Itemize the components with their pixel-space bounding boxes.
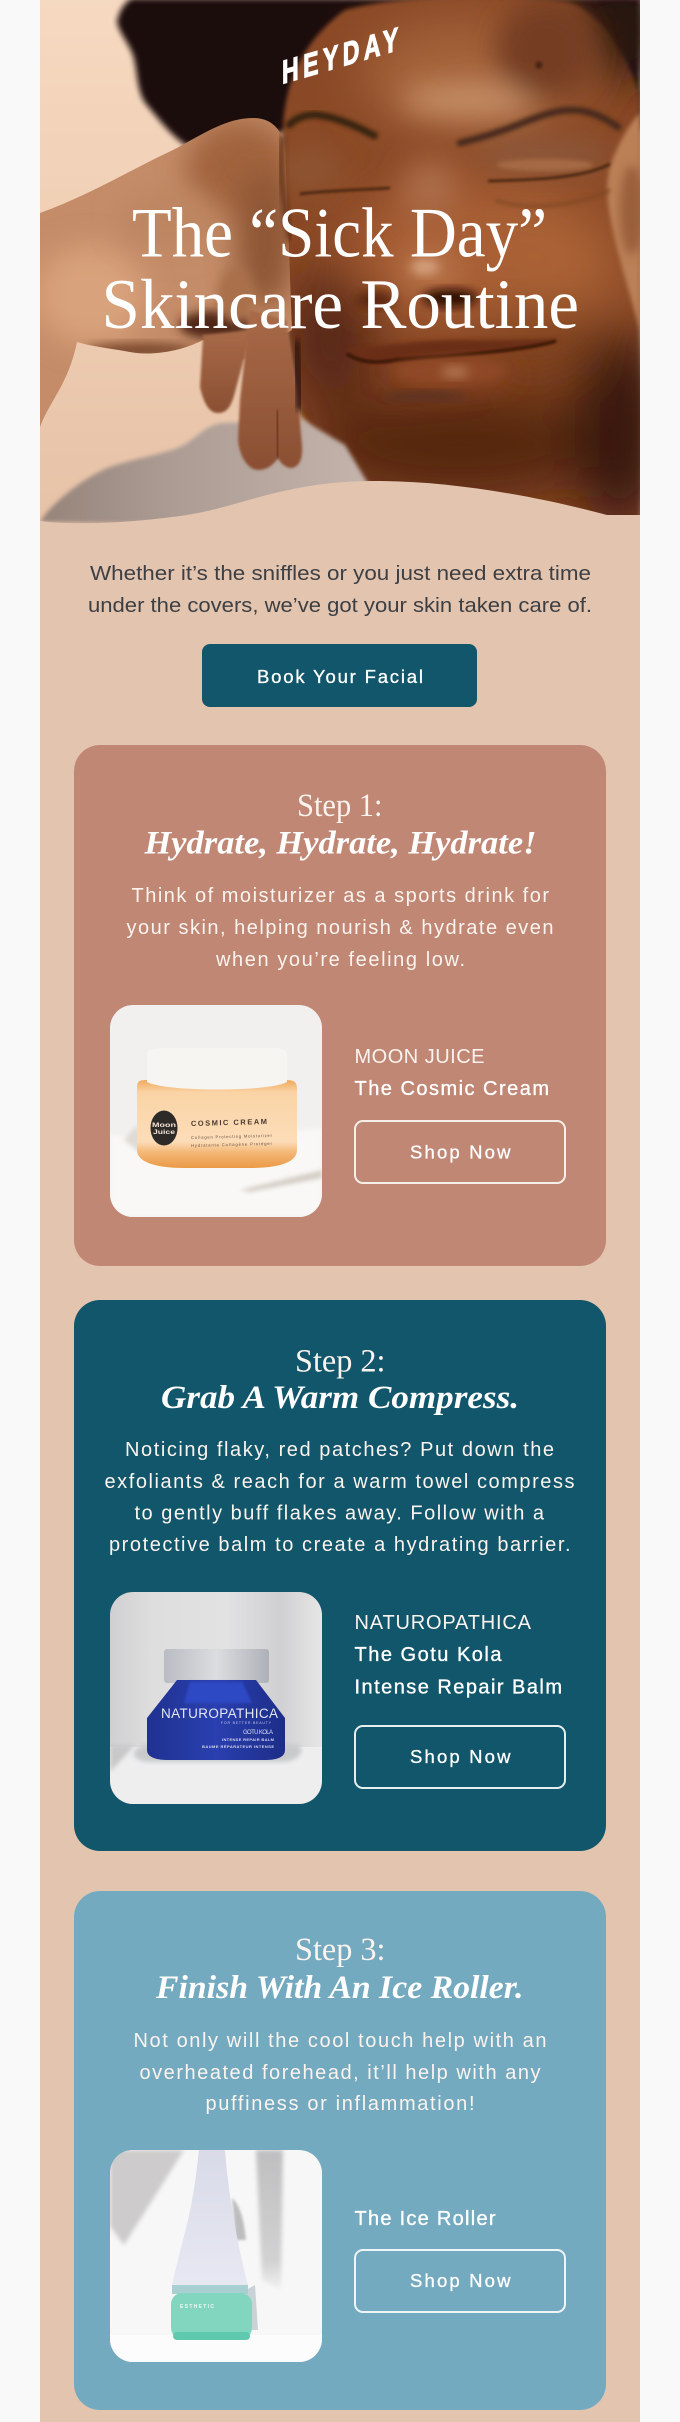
step 1 body text: Think of moisturizer as a sports drink for — [132, 885, 549, 907]
button: Book Your Facial — [202, 644, 477, 707]
product name: Naturopathica: NATUROPATHICA — [354, 1612, 532, 1634]
product photo: Cosmic Cream jar: Collagen Protecting Moisturizer — [191, 1133, 273, 1140]
step 3 heading: Step 3: — [295, 1932, 386, 1968]
step 2 body text — [104, 1439, 574, 1556]
step 1 heading — [143, 788, 537, 862]
step 2 heading: Grab A Warm Compress. — [161, 1380, 519, 1416]
intro text: Whether it’s the sniffles or you just need extra time — [90, 562, 591, 585]
intro text: under the covers, we’ve got your skin taken care of. — [88, 594, 592, 617]
product photo: ice roller: ESTHETIC — [180, 2304, 214, 2310]
step 3 body text: puffiness or inflammation! — [206, 2093, 474, 2115]
step 1 heading: Step 1: — [297, 788, 382, 824]
step 1 body text — [126, 885, 554, 971]
button: Shop Now — [355, 1726, 565, 1788]
step 2 body text: Noticing flaky, red patches? Put down the — [125, 1439, 554, 1461]
product photo: Cosmic Cream jar: COSMIC CREAM — [191, 1117, 267, 1128]
hero title: Skincare Routine — [102, 266, 579, 344]
button: Shop Now — [355, 2250, 565, 2312]
product name: Naturopathica: Intense Repair Balm — [354, 1676, 562, 1698]
hero title: The “Sick Day” — [132, 194, 547, 272]
product photo: Cosmic Cream jar: Hydratante Collagène Protéger — [191, 1141, 273, 1148]
step 1 body text: when you’re feeling low. — [215, 949, 465, 971]
hero title — [102, 194, 579, 344]
button: Shop Now — [355, 1121, 565, 1183]
product name: The Ice Roller: The Ice Roller — [354, 2208, 496, 2230]
step 2 body text: to gently buff flakes away. Follow with a — [134, 1502, 545, 1524]
step 2 body text: protective balm to create a hydrating barrier. — [109, 1534, 571, 1556]
step 2 body text: exfoliants & reach for a warm towel compress — [104, 1471, 574, 1493]
product photo: Cosmic Cream jar: Juice — [153, 1129, 176, 1136]
step 3 body text — [134, 2030, 546, 2115]
hero eyebrows, eyes, nose and mouth — [287, 62, 618, 401]
hero wave divider — [40, 481, 640, 534]
intro text — [88, 562, 592, 617]
product photo: Gotu Kola balm jar: GOTU KOLA — [243, 1730, 273, 1736]
button: Shop Now: Shop Now — [410, 2270, 511, 2291]
button: Book Your Facial: Book Your Facial — [257, 666, 423, 687]
step 3 body text: Not only will the cool touch help with an — [134, 2030, 546, 2052]
hero photo: smiling face resting on hand — [30, 0, 670, 530]
product photo: Cosmic Cream jar: Moon — [152, 1122, 176, 1129]
panel: step 2 — [74, 1300, 606, 1851]
product photo: Gotu Kola balm jar: FOR BETTER BEAUTY — [221, 1721, 272, 1725]
product name: Moon Juice: MOON JUICE — [354, 1046, 484, 1068]
step 1 heading: Hydrate, Hydrate, Hydrate! — [143, 826, 537, 862]
step 3 heading: Finish With An Ice Roller. — [155, 1970, 524, 2006]
panel: step 1 — [74, 745, 606, 1266]
product photo: ice roller — [110, 2150, 322, 2362]
step 2 heading — [161, 1344, 519, 1416]
step 1 body text: your skin, helping nourish & hydrate even — [126, 917, 554, 939]
button: Shop Now: Shop Now — [410, 1746, 511, 1767]
product photo: Gotu Kola balm jar: INTENSE REPAIR BALM — [222, 1737, 275, 1742]
product photo: Cosmic Cream jar — [110, 1005, 322, 1217]
step 3 heading — [155, 1932, 524, 2006]
product name: Moon Juice: The Cosmic Cream — [354, 1078, 549, 1100]
product photo: Gotu Kola balm jar: BAUME RÉPARATEUR INTENSE — [202, 1744, 274, 1749]
panel: step 3 — [74, 1891, 606, 2410]
button: Shop Now: Shop Now — [410, 1142, 511, 1162]
step 2 heading: Step 2: — [295, 1344, 386, 1380]
logo: HEYDAY: HEYDAY — [282, 21, 398, 92]
hero shirt — [40, 420, 372, 525]
product name: Moon Juice — [354, 1046, 549, 1100]
product name: Naturopathica — [354, 1612, 562, 1698]
product photo: Gotu Kola balm jar — [110, 1592, 322, 1804]
hero arm and hand — [30, 100, 644, 470]
product name: Naturopathica: The Gotu Kola — [354, 1644, 502, 1666]
step 3 body text: overheated forehead, it’ll help with any — [140, 2062, 540, 2084]
product photo: Gotu Kola balm jar: NATUROPATHICA — [161, 1706, 278, 1721]
